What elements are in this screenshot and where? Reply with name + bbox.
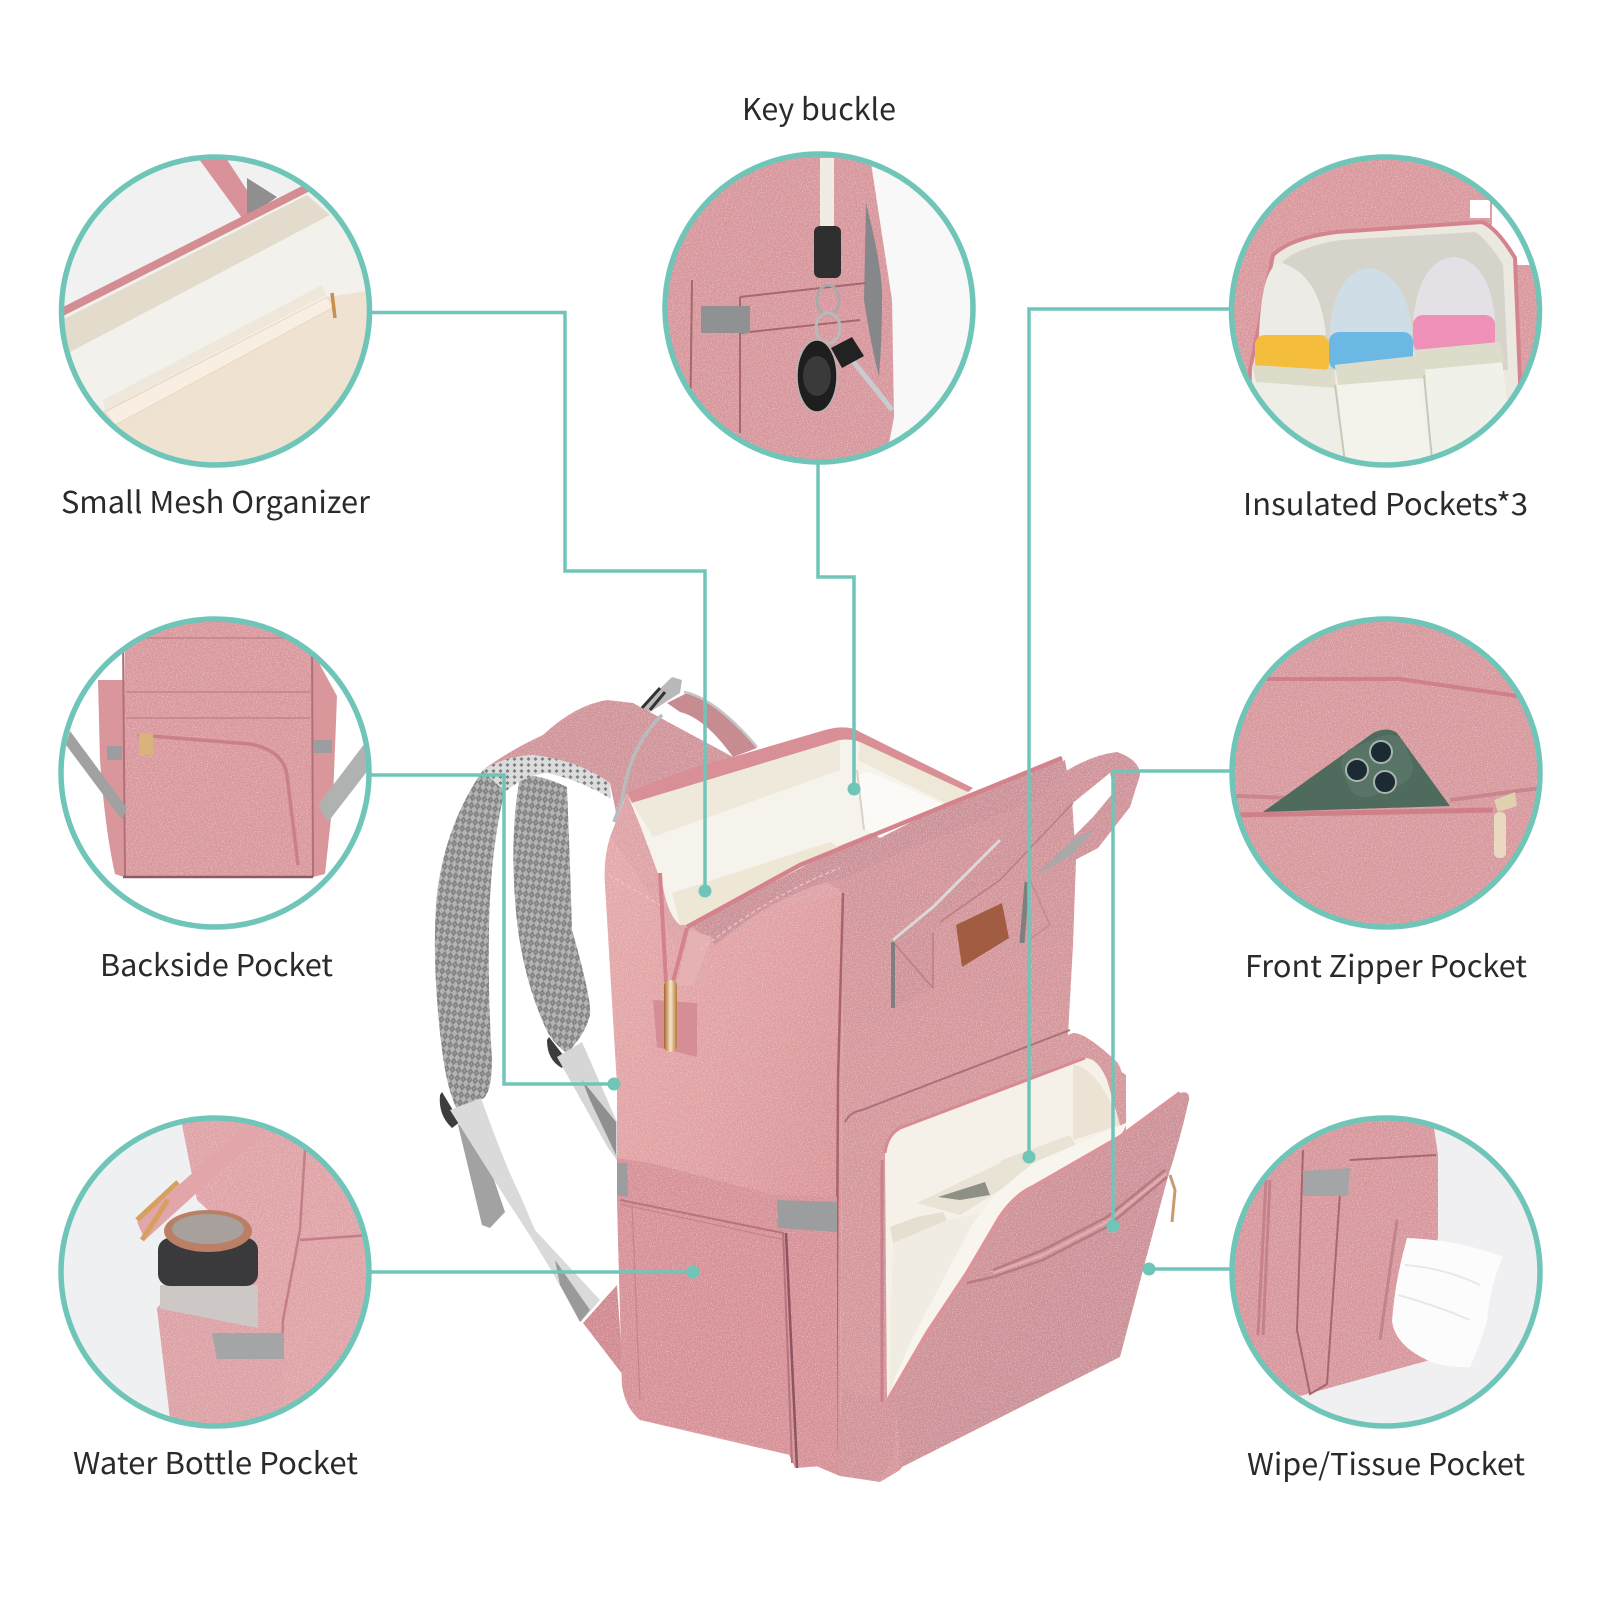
blue bottle [1329, 268, 1413, 370]
elastic strip right [777, 1200, 837, 1232]
main zipper [687, 758, 1062, 927]
zip pull [137, 1182, 178, 1240]
flap zipper [967, 1177, 1167, 1283]
elastic strip left [617, 1163, 628, 1197]
webbing strap tail [458, 1115, 505, 1228]
shoulder mesh arch [483, 755, 611, 799]
zipper [138, 735, 298, 865]
near shoulder strap mesh [435, 770, 505, 1112]
label: key buckle: Key buckle [742, 85, 896, 129]
tissue [1392, 1238, 1503, 1367]
front pocket opening lining [882, 1058, 1120, 1402]
front zip [1238, 810, 1493, 815]
panel: backside pocket [55, 615, 375, 935]
grey piping on pad [614, 715, 662, 822]
top opening lining [632, 740, 970, 925]
pull [1494, 792, 1517, 812]
fob [797, 340, 837, 412]
panel: small mesh organizer [55, 150, 375, 475]
key blade [852, 360, 892, 410]
opening interior [1248, 220, 1522, 434]
lining lower [104, 292, 367, 462]
label: wipe tissue pocket: Wipe/Tissue Pocket [1247, 1440, 1525, 1484]
line: front zipper pocket [1106, 771, 1231, 1232]
body [157, 1120, 366, 1416]
panel: main backpack illustration [435, 677, 1189, 1482]
front carry handle [893, 752, 1140, 1008]
zipper band [62, 188, 307, 312]
top opening rim [627, 727, 973, 803]
panel: wipe tissue pocket [1225, 1115, 1550, 1435]
handle hole [1073, 773, 1113, 834]
elastic strip [212, 1333, 284, 1359]
label: insulated pockets: Insulated Pockets*3 [1243, 480, 1528, 524]
top collar side [610, 793, 845, 960]
label: water bottle pocket: Water Bottle Pocket [73, 1439, 358, 1483]
panel: key buckle [660, 150, 980, 470]
seam stitch top [609, 868, 840, 950]
foot corner [836, 1388, 897, 1480]
pocket [157, 1308, 283, 1416]
bottle [158, 1210, 258, 1335]
upper slot line [1236, 788, 1540, 800]
far shoulder strap mesh [513, 776, 590, 1053]
line: key buckle [818, 463, 860, 796]
top zip [1263, 679, 1517, 696]
leather patch [956, 903, 1009, 967]
label: backside pocket: Backside Pocket [100, 941, 333, 985]
bag body side and front [605, 757, 1126, 1482]
flap satin lining edge [887, 1122, 1128, 1402]
inner pockets [917, 1135, 1078, 1215]
zipper strip [137, 1122, 267, 1240]
webbing strap main [450, 1098, 600, 1322]
line: insulated pockets [1022, 309, 1231, 1164]
shoulder pad top [483, 700, 733, 817]
tape band [62, 195, 330, 352]
elastic strap [701, 306, 750, 333]
yellow bottle [1255, 263, 1329, 373]
rings [817, 285, 839, 315]
side panels [98, 680, 126, 877]
inner pocket zipper [105, 297, 334, 425]
black buckles [440, 1037, 567, 1128]
label: front zipper pocket: Front Zipper Pocket [1245, 942, 1527, 986]
line: small mesh organizer [370, 312, 712, 898]
pockets [1252, 367, 1253, 382]
opened flap [887, 1092, 1189, 1468]
side face [605, 837, 843, 1476]
line: wipe tissue pocket [1142, 1262, 1231, 1276]
phone [1263, 729, 1450, 812]
zip [1258, 1180, 1270, 1335]
strap [200, 160, 247, 217]
rear top loop handle [640, 677, 757, 757]
panel: insulated pockets [1225, 150, 1545, 475]
panel: water bottle pocket [55, 1115, 375, 1435]
white strap [820, 158, 834, 226]
line: backside pocket [370, 775, 620, 1090]
zipper tab and pull [653, 980, 697, 1057]
back panel [123, 620, 313, 877]
lining lower left [96, 404, 104, 411]
front pocket frame [843, 1033, 1126, 1405]
slit [1380, 1220, 1397, 1340]
top flap lip [690, 757, 1066, 945]
back bottom gusset [583, 1285, 623, 1375]
front face [800, 760, 1126, 1482]
body seam [836, 893, 843, 1465]
pink bottle [1413, 257, 1495, 352]
seams [690, 280, 866, 440]
line: water bottle pocket [370, 1266, 700, 1278]
pocket frame shadow line [845, 1030, 1070, 1122]
body [1225, 1115, 1438, 1396]
callout lines and dots [370, 309, 1231, 1278]
webbing strap right [557, 1042, 617, 1160]
black clip [814, 226, 841, 278]
lining upper [60, 190, 375, 475]
flap zip pull [1170, 1175, 1175, 1222]
panel: front zipper pocket [1225, 615, 1550, 935]
straps [66, 731, 127, 820]
label: small mesh organizer: Small Mesh Organizer [61, 478, 370, 522]
side water bottle pocket [617, 1158, 837, 1468]
elastic strip [1303, 1168, 1350, 1196]
mesh side [864, 203, 882, 377]
zipper ribbon [677, 930, 712, 985]
zipper pull [139, 733, 153, 755]
key head [831, 337, 864, 368]
